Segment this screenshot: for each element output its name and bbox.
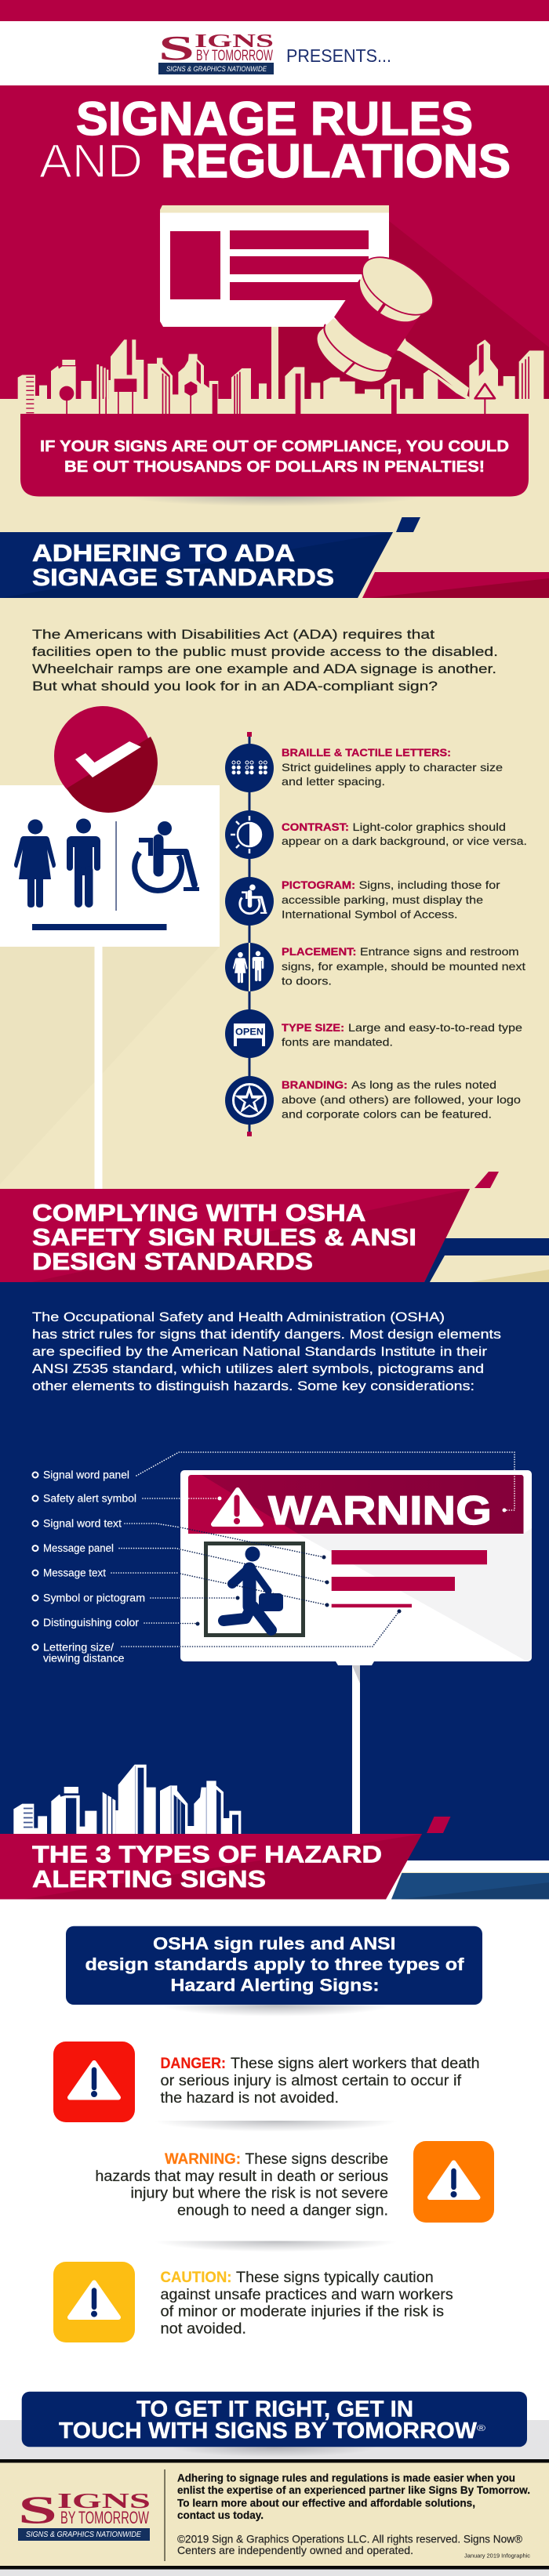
- icon: warning: [413, 2141, 494, 2223]
- icon: danger: [53, 2042, 135, 2122]
- section heading: OSHA: COMPLYING WITH OSHA: [32, 1199, 365, 1226]
- OSHA intro text: [32, 1310, 501, 1393]
- section heading: ADA: ADHERING TO ADA: [32, 539, 295, 567]
- placement text: to doors.: [282, 975, 332, 987]
- section heading: OSHA: [0, 1172, 549, 1282]
- call to action: TO GET IT RIGHT, GET IN: [136, 2397, 413, 2422]
- hero panel: [0, 85, 549, 414]
- section heading: hazard types: ALERTING SIGNS: [32, 1865, 266, 1893]
- branding text: As long as the rules noted: [351, 1078, 496, 1091]
- diagram labels: Signal word panel: [43, 1469, 129, 1481]
- placement text: [282, 945, 525, 987]
- OSHA intro text: are specified by the American National Standards Institute in their: [32, 1344, 487, 1359]
- footer text: enlist the expertise of an experienced partner like Signs By Tomorrow.: [177, 2484, 530, 2496]
- call to action: [0, 2392, 549, 2459]
- logo: Signs By Tomorrow: BY TOMORROW: [196, 48, 273, 64]
- contrast text: [282, 821, 527, 847]
- section heading: ADA: [0, 517, 549, 598]
- penalty callout banner: [20, 414, 529, 506]
- footer logo: [18, 2487, 151, 2541]
- diagram labels: viewing distance: [43, 1652, 124, 1665]
- skyline left: [18, 339, 267, 414]
- diagram labels: Message panel: [43, 1542, 114, 1554]
- caution text: against unsafe practices and warn workers: [160, 2287, 453, 2303]
- warning text: enough to need a danger sign.: [177, 2203, 388, 2219]
- pictogram text: Signs, including those for: [359, 879, 500, 891]
- diagram labels: Signal word text: [43, 1517, 122, 1530]
- ground strip and skyline detail: [0, 343, 549, 414]
- type size text: Large and easy-to-to-read type: [348, 1021, 522, 1034]
- diagram labels: Lettering size/: [43, 1641, 114, 1654]
- footer text: ©2019 Sign & Graphics Operations LLC. All rights reserved. Signs Now®: [177, 2532, 523, 2545]
- icon: check badge: [54, 706, 158, 813]
- callout: standards apply: design standards apply to three types of: [85, 1955, 464, 1974]
- safety alert symbol: [213, 1490, 261, 1524]
- section heading: OSHA: DESIGN STANDARDS: [32, 1248, 313, 1275]
- warning text: [95, 2151, 388, 2219]
- danger text: These signs alert workers that death: [231, 2056, 480, 2072]
- branding text: and corporate colors can be featured.: [282, 1108, 492, 1121]
- navy OSHA panel: [0, 1282, 549, 1860]
- title: AND: [39, 135, 143, 187]
- diagram labels: Distinguishing color: [43, 1617, 140, 1629]
- branding text: above (and others) are followed, your logo: [282, 1093, 521, 1106]
- message bars: [332, 1550, 487, 1607]
- footer text: Centers are independently owned and operated.: [177, 2544, 413, 2556]
- pictogram text: [282, 879, 500, 920]
- section heading: ADA: SIGNAGE STANDARDS: [32, 563, 334, 591]
- logo: Signs By Tomorrow: S: [158, 29, 195, 67]
- footer text: To learn more about our effective and affordable solutions,: [177, 2497, 475, 2509]
- icon: star badge: [225, 1076, 274, 1125]
- pictogram text: accessible parking, must display the: [282, 893, 483, 906]
- icon: wheelchair: [225, 877, 274, 926]
- skyline right: [285, 339, 544, 399]
- caution text: CAUTION:: [160, 2270, 232, 2286]
- icon: caution: [53, 2262, 135, 2342]
- pictogram text: PICTOGRAM:: [282, 879, 355, 891]
- section heading: OSHA: SAFETY SIGN RULES & ANSI: [32, 1223, 416, 1251]
- top header strip with logo: [0, 0, 549, 85]
- branding text: BRANDING:: [282, 1078, 347, 1091]
- warning text: injury but where the risk is not severe: [130, 2186, 388, 2202]
- section heading: hazard types: THE 3 TYPES OF HAZARD: [32, 1840, 382, 1868]
- penalty callout banner: BE OUT THOUSANDS OF DOLLARS IN PENALTIES!: [64, 458, 485, 476]
- gavel: [307, 245, 469, 397]
- contrast text: Light-color graphics should: [353, 821, 506, 833]
- braille text: [282, 746, 503, 788]
- pictogram: restrooms and access: [14, 818, 199, 930]
- caution text: of minor or moderate injuries if the risk is: [160, 2304, 444, 2321]
- warning text: These signs describe: [245, 2151, 388, 2168]
- braille text: BRAILLE & TACTILE LETTERS:: [282, 746, 451, 759]
- ADA intro text: facilities open to the public must provide access to the disabled.: [32, 644, 498, 659]
- signal word panel: [188, 1475, 524, 1534]
- branding text: [282, 1078, 521, 1121]
- braille text: and letter spacing.: [282, 775, 385, 788]
- icon: open sign: [225, 1009, 274, 1058]
- presents label: PRESENTS...: [286, 45, 391, 66]
- icon: contrast: [225, 810, 274, 859]
- section heading: hazard types: [0, 1817, 549, 1900]
- footer text: Adhering to signage rules and regulations is made easier when you: [177, 2472, 515, 2484]
- placement text: signs, for example, should be mounted next: [282, 960, 525, 973]
- footer text: [177, 2472, 531, 2560]
- diagram labels: Symbol or pictogram: [43, 1592, 145, 1603]
- footer logo: SIGNS & GRAPHICS NATIONWIDE: [26, 2530, 142, 2539]
- footer text: contact us today.: [177, 2509, 264, 2521]
- logo: Signs By Tomorrow: IGNS: [195, 31, 274, 52]
- ADA sign illustration: [0, 706, 220, 1190]
- call to action: ®: [477, 2424, 485, 2433]
- billboard: [160, 205, 389, 405]
- danger text: [160, 2056, 480, 2107]
- OSHA intro text: The Occupational Safety and Health Administration (OSHA): [32, 1310, 445, 1324]
- white lower background: [0, 1900, 549, 2420]
- contrast text: CONTRAST:: [282, 821, 349, 833]
- warning text: WARNING:: [165, 2151, 241, 2168]
- OSHA intro text: ANSI Z535 standard, which utilizes alert symbols, pictograms and: [32, 1361, 484, 1376]
- caution text: [160, 2270, 453, 2338]
- callout: standards apply: [66, 1926, 482, 2016]
- title: SIGNAGE RULES: [76, 92, 473, 145]
- type size text: fonts are mandated.: [282, 1036, 393, 1049]
- title: REGULATIONS: [161, 135, 511, 187]
- diagram labels: Safety alert symbol: [43, 1492, 136, 1505]
- pictogram text: International Symbol of Access.: [282, 908, 458, 920]
- title: [39, 92, 511, 187]
- gavel long shadow: [278, 221, 549, 399]
- callout: standards apply: OSHA sign rules and ANSI: [153, 1934, 395, 1954]
- dotted leader lines: [111, 1452, 514, 1647]
- placement text: PLACEMENT:: [282, 945, 356, 958]
- footer logo: IGNS: [57, 2489, 151, 2513]
- logo: Signs By Tomorrow: [158, 29, 274, 74]
- logo: Signs By Tomorrow: SIGNS & GRAPHICS NATIONWIDE: [166, 65, 267, 74]
- white skyline: [13, 1765, 241, 1834]
- call to action: TOUCH WITH SIGNS BY TOMORROW: [59, 2418, 478, 2444]
- footer logo: BY TOMORROW: [60, 2508, 149, 2527]
- braille text: Strict guidelines apply to character size: [282, 761, 503, 774]
- danger text: DANGER:: [160, 2056, 226, 2072]
- ADA intro text: But what should you look for in an ADA-compliant sign?: [32, 679, 438, 694]
- ADA intro text: The Americans with Disabilities Act (ADA) requires that: [32, 627, 434, 642]
- caution text: These signs typically caution: [236, 2270, 434, 2286]
- footer: [0, 2459, 549, 2576]
- type size text: [282, 1021, 522, 1049]
- callout: standards apply: Hazard Alerting Signs:: [170, 1976, 380, 1995]
- OSHA intro text: has strict rules for signs that identify dangers. Most design elements: [32, 1327, 501, 1342]
- ADA intro text: Wheelchair ramps are one example and ADA signage is another.: [32, 661, 496, 676]
- caution text: not avoided.: [160, 2321, 246, 2338]
- message panel: running figure: [205, 1544, 303, 1635]
- footer logo: S: [18, 2487, 57, 2531]
- icon: open sign: OPEN: [235, 1028, 264, 1038]
- timeline of ADA requirements: [225, 732, 527, 1136]
- type size text: TYPE SIZE:: [282, 1021, 344, 1034]
- warning sign diagram: [180, 1470, 532, 1834]
- contrast text: appear on a dark background, or vice versa.: [282, 835, 527, 847]
- ADA intro text: [32, 627, 498, 694]
- danger text: or serious injury is almost certain to occur if: [160, 2073, 462, 2089]
- icon: placement: [225, 943, 274, 991]
- warning text: hazards that may result in death or serious: [95, 2168, 388, 2185]
- icon: braille: [225, 744, 274, 792]
- penalty callout banner: IF YOUR SIGNS ARE OUT OF COMPLIANCE, YOU COULD: [40, 438, 509, 455]
- placement text: Entrance signs and restroom: [360, 945, 519, 958]
- footer text: January 2019 Infographic: [464, 2553, 531, 2560]
- diagram labels: [33, 1469, 145, 1665]
- OSHA intro text: other elements to distinguish hazards. Some key considerations:: [32, 1379, 474, 1393]
- signal word: WARNING: [268, 1488, 492, 1534]
- diagram labels: Message text: [43, 1567, 106, 1578]
- danger text: the hazard is not avoided.: [160, 2090, 339, 2107]
